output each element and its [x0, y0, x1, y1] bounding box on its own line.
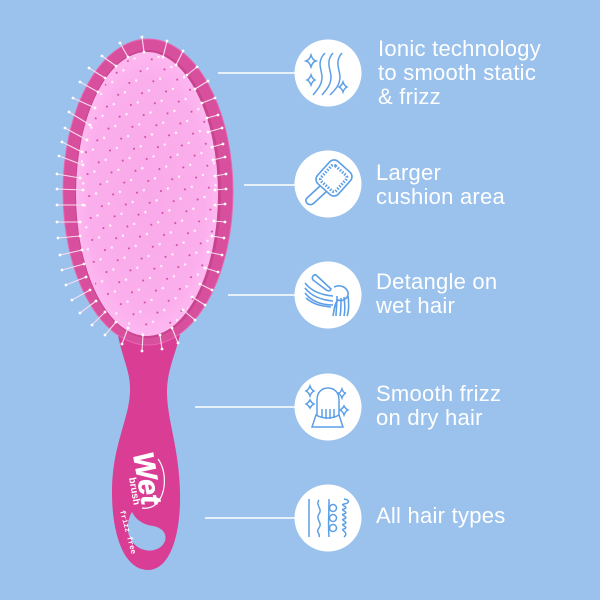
- text: all hair types: All hair types: [376, 503, 505, 528]
- perimeter bristles: [57, 37, 226, 351]
- handle logo: [117, 450, 167, 556]
- text: ionic technology: [378, 36, 541, 109]
- handle logo: Wet: [126, 450, 167, 508]
- handle hole: [128, 512, 166, 551]
- text: ionic technology: to smooth static: [378, 60, 536, 85]
- text: smooth frizz on dry hair: on dry hair: [376, 405, 483, 430]
- cushion: [76, 52, 218, 336]
- rim inner shadow: [75, 50, 221, 338]
- brush: [57, 37, 233, 570]
- text: larger cushion area: [376, 160, 505, 209]
- cushion bristle dots: [79, 54, 217, 334]
- handle logo: frizz free: [117, 510, 137, 556]
- text: detangle on wet hair: [376, 269, 497, 318]
- text: larger cushion area: Larger: [376, 160, 441, 185]
- connector lines: [195, 73, 295, 518]
- icon circle: paddle brush: [294, 150, 362, 218]
- text: detangle on wet hair: Detangle on: [376, 269, 497, 294]
- icon circle: frizz dome: [294, 374, 362, 440]
- infographic canvas: [56, 36, 362, 570]
- icon circle: detangle: [294, 262, 362, 328]
- text: smooth frizz on dry hair: Smooth frizz: [376, 381, 501, 406]
- text: ionic technology: & frizz: [378, 84, 441, 109]
- text: smooth frizz on dry hair: [376, 381, 501, 430]
- text: detangle on wet hair: wet hair: [376, 293, 455, 318]
- text: ionic technology: Ionic technology: [378, 36, 541, 61]
- icon circle: ionic waves: [294, 40, 362, 106]
- brush handle: [112, 335, 180, 570]
- text: larger cushion area: cushion area: [376, 184, 505, 209]
- brush head rim: [63, 39, 233, 345]
- handle logo: brush: [126, 477, 142, 506]
- icon circle: hair types: [294, 484, 362, 552]
